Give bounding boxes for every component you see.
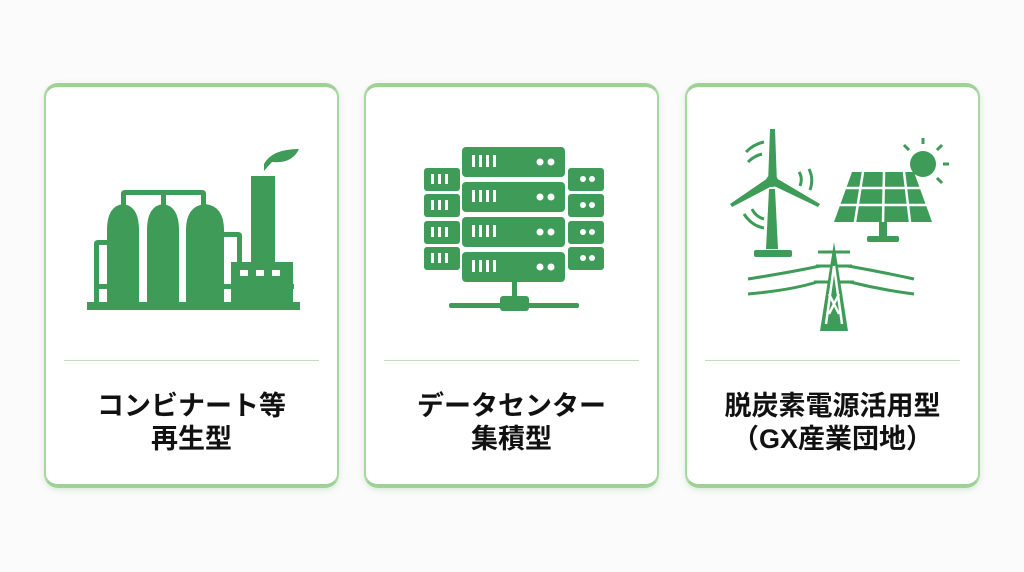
label: コンビナート等 [97,391,286,421]
panel: combinat [44,83,339,488]
icon: factory [87,149,300,310]
icon: servers [424,147,604,311]
label [724,391,940,454]
label: 脱炭素電源活用型 [724,391,940,421]
label [417,391,606,454]
label: データセンター [417,391,606,421]
label [97,391,286,454]
icon: renewables [730,129,949,331]
label: 集積型 [471,424,552,454]
label: 再生型 [151,424,232,454]
panel: GX [685,83,980,488]
label: （GX産業団地） [732,424,933,454]
panel: data center [364,83,659,488]
